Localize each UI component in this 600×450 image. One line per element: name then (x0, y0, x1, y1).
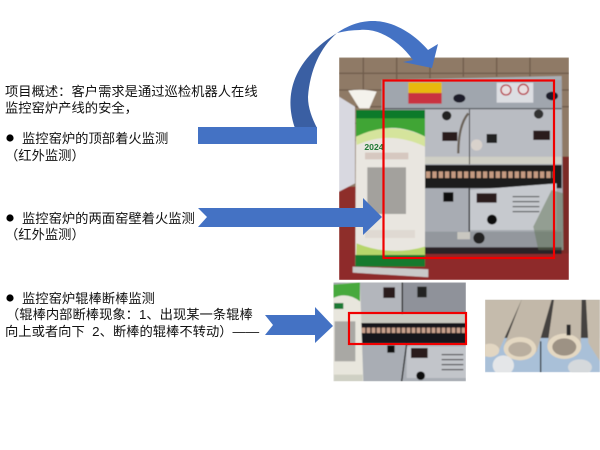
arrow: bottom arrow (265, 307, 333, 343)
text: top fire monitoring: （红外监测） (5, 148, 85, 163)
photo: kiln machine at exhibition (339, 57, 569, 280)
text: project overview: 项目概述：客户需求是通过巡检机器人在线 (5, 83, 258, 99)
photo: ceramic rollers close-up (481, 300, 600, 375)
text: roller breakage monitoring (5, 290, 260, 339)
red highlight box: roller row (349, 313, 466, 344)
text: top fire monitoring (5, 130, 168, 163)
photo: kiln machine at exhibition: 2024 (364, 142, 384, 152)
red highlight box: top photo (384, 80, 554, 258)
text: roller breakage monitoring: 向上或者向下 2、断棒的辊棒不转动）—— (5, 324, 260, 339)
text: kiln wall fire monitoring (5, 210, 195, 242)
text: roller breakage monitoring: （辊棒内部断棒现象：1、出现某一条辊棒 (6, 306, 253, 322)
text: kiln wall fire monitoring: （红外监测） (5, 227, 85, 242)
text: roller breakage monitoring: 监控窑炉辊棒断棒监测 (22, 290, 155, 306)
text: project overview: 监控窑炉产线的安全， (5, 100, 138, 116)
arrow: middle arrow (198, 198, 382, 235)
text: kiln wall fire monitoring: 监控窑炉的两面窑壁着火监测 (22, 210, 195, 226)
text: top fire monitoring: 监控窑炉的顶部着火监测 (22, 130, 168, 146)
photo: roller close-up (333, 282, 466, 381)
arrow: curved top arrow (198, 21, 438, 144)
